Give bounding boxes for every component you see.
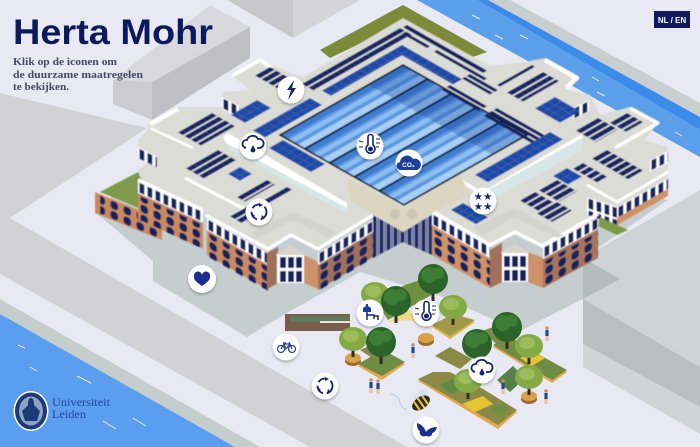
logo: Universiteit Leiden: Leiden: [52, 409, 86, 421]
grey street area left and road: [0, 93, 407, 447]
canal top right: [417, 0, 700, 157]
language switch: NL / EN: [658, 16, 686, 25]
garden beds: [358, 280, 567, 429]
entrance left: [267, 245, 318, 289]
roof hull: [138, 18, 668, 250]
building: [95, 18, 668, 291]
people: [369, 326, 549, 404]
white parapets: [138, 60, 668, 249]
logo: Universiteit Leiden: Universiteit: [52, 397, 111, 409]
central wing band left: [223, 133, 347, 214]
icon: recycle ground: [312, 372, 338, 400]
icon: cloud with rain: [240, 132, 266, 160]
canal bottom left: [0, 299, 260, 447]
title: Herta Mohr: [13, 13, 213, 52]
icon: heart: [188, 265, 216, 293]
grass roof left block: [100, 172, 163, 218]
intro text: de duurzame maatregelen: [13, 69, 143, 81]
facade right block: [587, 178, 668, 225]
green roof olive strip: [320, 5, 487, 58]
central wing band right: [470, 138, 582, 207]
plaza ground under building: [95, 150, 668, 337]
green strip right: [598, 217, 628, 235]
icon: butterfly: [412, 416, 440, 444]
planter wall: [285, 314, 350, 331]
intro text: Klik op de iconen om: [13, 56, 117, 68]
icon: CO2 cloud: [396, 150, 422, 176]
grey neighbouring building left: [113, 5, 250, 120]
trees: [339, 264, 543, 404]
icon: four stars: ★★: [474, 191, 492, 203]
facade far right front: [543, 217, 598, 288]
icon: recycle roof: [246, 198, 272, 226]
icon: cloud with rain garden: [468, 356, 496, 384]
logo: Universiteit Leiden: [14, 391, 111, 431]
intro text: te bekijken.: [13, 81, 69, 93]
tan wall below glass: [347, 174, 470, 232]
facade centre left: [318, 220, 373, 291]
small upper window bays: [138, 97, 668, 172]
icon: four stars: [470, 188, 496, 214]
solar panels: [178, 25, 643, 224]
icon: bicycle: [272, 334, 300, 360]
icon: lightning bolt: [278, 76, 304, 104]
facade west wing front: [207, 218, 268, 291]
intro text: [13, 56, 143, 93]
icon: CO2 cloud: CO₂: [402, 162, 415, 169]
roof ridges: [250, 208, 563, 238]
icon: thermometer garden: [412, 300, 440, 326]
language switch: [654, 11, 690, 28]
glass atrium roof: [280, 65, 527, 205]
facade west wing upper: [138, 181, 203, 249]
central curtain wall: [373, 215, 432, 258]
icon: thermometer glass roof: [356, 132, 384, 160]
icon: four stars: ★★: [474, 201, 492, 213]
brick block left: [95, 192, 162, 240]
bee: [390, 375, 435, 419]
icon: water pump: [356, 300, 384, 326]
entrance right: [490, 243, 543, 288]
grey neighbouring building top: [227, 0, 360, 38]
building block bottom right: [583, 190, 700, 434]
facade east wing front: [432, 213, 490, 288]
